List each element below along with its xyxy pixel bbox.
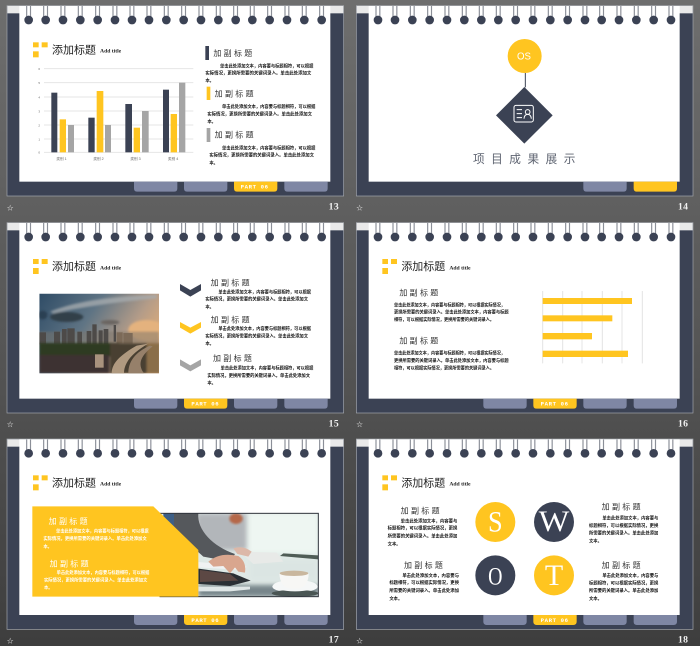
text block T: 文本。 <box>589 595 602 602</box>
text block 2: 单击此处添加文本，内容要与标题相符，可以根据 <box>57 569 150 576</box>
text block T: 所需要的关键词录入。单击此处添加 <box>589 587 658 594</box>
text block 1: 加副标题 <box>49 516 90 526</box>
W circle <box>534 502 574 542</box>
text block 3 <box>207 353 314 387</box>
text block S: 单击此处添加文本，内容要与 <box>401 518 457 525</box>
text block O: 单击此处添加文本，内容要与 <box>402 572 459 579</box>
text block S: 文本。 <box>388 540 401 547</box>
W circle: W <box>539 506 570 538</box>
text block 2: 单击此处添加文本，内容要与标题相符，可以根据 <box>222 103 316 110</box>
slide 13: bar chart <box>7 6 344 213</box>
text block T: 加副标题 <box>602 560 643 570</box>
slide 16: horizontal bars <box>356 223 693 429</box>
text block 1 <box>205 277 312 310</box>
bar chart: 1 <box>38 137 40 141</box>
bar chart: 2 <box>38 123 40 127</box>
text block 1 <box>43 516 149 550</box>
text block 1: 实际情况，更换所需要的关键词录入。单击此处添加文 <box>43 535 147 542</box>
text block 2: 更换所需要的关键词录入。单击此处添加文本，内容要与标题 <box>394 357 509 364</box>
bar chart: 6 <box>38 67 40 71</box>
horizontal bar chart <box>543 291 642 363</box>
title: Add title <box>100 49 122 55</box>
text block 3: 加副标题 <box>215 129 256 139</box>
section title: 项目成果展示 <box>473 153 582 166</box>
text block W: 标题相符，可以根据实际情况，更换 <box>589 522 659 529</box>
binder frame and tabs: PART 06 <box>191 617 219 624</box>
icon: yellow chevron <box>180 322 201 334</box>
text block 1: 本。 <box>205 303 214 310</box>
bar chart: 5 <box>38 81 40 85</box>
T circle <box>534 555 574 595</box>
text block 2: 相符，可以根据实际情况，更换所需要的关键词录入。 <box>394 364 494 371</box>
text block 2: 本。 <box>207 118 216 125</box>
title <box>33 42 122 57</box>
text block 1 <box>394 287 509 323</box>
text block 1: 本。 <box>43 543 52 550</box>
page number: 16 <box>678 418 688 429</box>
slide 15: photo and chevrons <box>7 223 344 429</box>
bar chart: 0 <box>38 151 40 155</box>
text block 2: 本。 <box>44 584 53 591</box>
text block 2: 单击此处添加文本，内容要与标题相符，可以根据实际情况， <box>394 349 505 356</box>
text block 1: 单击此处添加文本，内容要与标题相符，可以根据 <box>56 528 149 535</box>
footer icon: ☆ <box>356 420 363 429</box>
bar chart: 4 <box>38 95 40 99</box>
title: Add title <box>449 265 471 271</box>
binder frame and tabs <box>356 439 693 629</box>
page number: 18 <box>678 635 688 646</box>
text block 2 <box>44 558 150 591</box>
title: Add title <box>449 482 471 488</box>
text block O <box>389 560 460 602</box>
text block 1: 实际情况，更换所需要的关键词录入。单击此处添加文 <box>205 70 312 77</box>
bar chart: 类别 4 <box>168 156 178 161</box>
text block 3: 加副标题 <box>213 353 254 363</box>
photo: hands on tablet <box>160 513 318 597</box>
title: 添加标题 <box>52 42 96 56</box>
footer icon: ☆ <box>7 204 14 213</box>
text block 1: 单击此处添加文本，内容要与标题相符，可以根据实际情况， <box>394 301 505 308</box>
text block 3: 实际情况，更换所需要的关键词录入。单击此处添加文 <box>207 372 311 379</box>
page number: 15 <box>329 418 339 429</box>
title: 添加标题 <box>52 259 96 273</box>
text block S: 标题相符，可以根据实际情况，更换 <box>388 524 458 531</box>
text block 2: 加副标题 <box>399 335 441 345</box>
slide 17: yellow panel and photo <box>7 439 344 646</box>
text block 3: 实际情况，更换所需要的关键词录入。单击此处添加文 <box>209 152 315 159</box>
title <box>382 475 471 490</box>
text block 1: 加副标题 <box>399 287 441 297</box>
connector line <box>524 73 527 87</box>
text block 1: 单击此处添加文本，内容要与标题相符，可以根据 <box>220 62 314 69</box>
text block O: 文本。 <box>389 595 402 602</box>
section number badge <box>508 39 542 73</box>
bar chart: 类别 2 <box>93 156 104 161</box>
page number: 14 <box>678 202 688 213</box>
photo: city skyline at sunset <box>38 294 165 373</box>
text block W: 加副标题 <box>602 502 643 512</box>
binder frame and tabs <box>7 223 344 413</box>
text block S <box>388 505 458 547</box>
text block T <box>589 560 659 602</box>
section number badge: OS <box>517 52 531 63</box>
title: Add title <box>100 482 122 488</box>
text block 1 <box>205 46 314 84</box>
title <box>33 259 122 274</box>
title: 添加标题 <box>401 475 445 489</box>
footer icon: ☆ <box>7 636 14 645</box>
text block 2 <box>207 87 316 125</box>
O circle <box>475 555 515 595</box>
binder frame and tabs <box>356 223 693 413</box>
binder frame and tabs: PART 06 <box>241 184 269 191</box>
text block T: 标题相符，可以根据实际情况，更换 <box>589 579 659 586</box>
O circle: O <box>488 563 502 591</box>
text block 3: 单击此处添加文本，内容要与标题相符，可以根据 <box>222 144 316 151</box>
text block 2: 加副标题 <box>211 314 252 324</box>
text block 3: 本。 <box>207 380 216 387</box>
footer icon: ☆ <box>356 636 363 645</box>
text block 3: 本。 <box>209 160 218 167</box>
icon: id card in diamond <box>496 87 553 144</box>
yellow panel <box>32 506 198 597</box>
text block 2 <box>394 335 509 371</box>
text block 2: 本。 <box>205 340 214 347</box>
text block T: 单击此处添加文本，内容要与 <box>602 572 658 579</box>
icon: dark chevron <box>180 284 201 297</box>
text block 3 <box>207 128 316 167</box>
text block 1: 相符，可以根据实际情况，更换所需要的关键词录入。 <box>394 316 494 323</box>
text block 2 <box>205 314 312 347</box>
slide 14: section cover <box>356 6 693 213</box>
text block W: 单击此处添加文本，内容要与 <box>602 515 658 522</box>
title: 添加标题 <box>52 475 96 489</box>
T circle: T <box>545 559 563 592</box>
binder frame and tabs <box>7 439 344 629</box>
binder frame and tabs: PART 06 <box>541 617 569 624</box>
footer icon: ☆ <box>7 420 14 429</box>
text block 2: 加副标题 <box>215 89 256 99</box>
bar chart <box>38 67 193 161</box>
title <box>382 259 471 274</box>
text block 1: 加副标题 <box>213 48 255 58</box>
text block 1: 实际情况，更换所需要的关键词录入。单击此处添加文 <box>205 296 309 303</box>
text block 3: 单击此处添加文本，内容要与标题相符，可以根据 <box>221 365 314 372</box>
title: Add title <box>100 265 122 271</box>
binder frame and tabs: PART 06 <box>541 401 569 408</box>
text block S: 所需要的关键词录入。单击此处添加 <box>388 532 457 539</box>
page number: 13 <box>329 202 339 213</box>
text block W: 文本。 <box>589 538 602 545</box>
text block O: 标题相符，可以根据实际情况，更换 <box>389 579 460 586</box>
bar chart: 3 <box>38 109 40 113</box>
text block 2: 实际情况，更换所需要的关键词录入。单击此处添加文 <box>44 576 148 583</box>
text block S: 加副标题 <box>401 505 442 515</box>
text block 2: 加副标题 <box>50 558 91 568</box>
text block O: 加副标题 <box>404 560 445 570</box>
text block 1: 本。 <box>205 77 214 84</box>
binder frame and tabs <box>356 6 693 196</box>
icon: grey chevron <box>180 359 201 371</box>
text block 2: 单击此处添加文本，内容要与标题相符，可以根据 <box>218 325 312 332</box>
S circle: S <box>488 506 503 538</box>
text block 2: 实际情况，更换所需要的关键词录入。单击此处添加文 <box>207 110 313 117</box>
binder frame and tabs <box>7 6 344 196</box>
bar chart: 类别 1 <box>56 156 67 161</box>
page number: 17 <box>329 635 339 646</box>
S circle <box>475 502 515 542</box>
text block W <box>589 502 659 545</box>
title <box>33 475 122 490</box>
text block 1: 更换所需要的关键词录入。单击此处添加文本，内容要与标题 <box>394 309 509 316</box>
text block W: 所需要的关键词录入。单击此处添加 <box>589 530 658 537</box>
slide 18: SWOT <box>356 439 693 646</box>
binder frame and tabs: PART 06 <box>191 401 219 408</box>
bar chart: 类别 3 <box>130 156 141 161</box>
title: 添加标题 <box>401 259 445 273</box>
text block O: 所需要的关键词录入。单击此处添加 <box>389 587 459 594</box>
text block 1: 单击此处添加文本，内容要与标题相符，可以根据 <box>218 288 312 295</box>
text block 1: 加副标题 <box>211 277 252 287</box>
footer icon: ☆ <box>356 204 363 213</box>
text block 2: 实际情况，更换所需要的关键词录入。单击此处添加文 <box>205 332 309 339</box>
